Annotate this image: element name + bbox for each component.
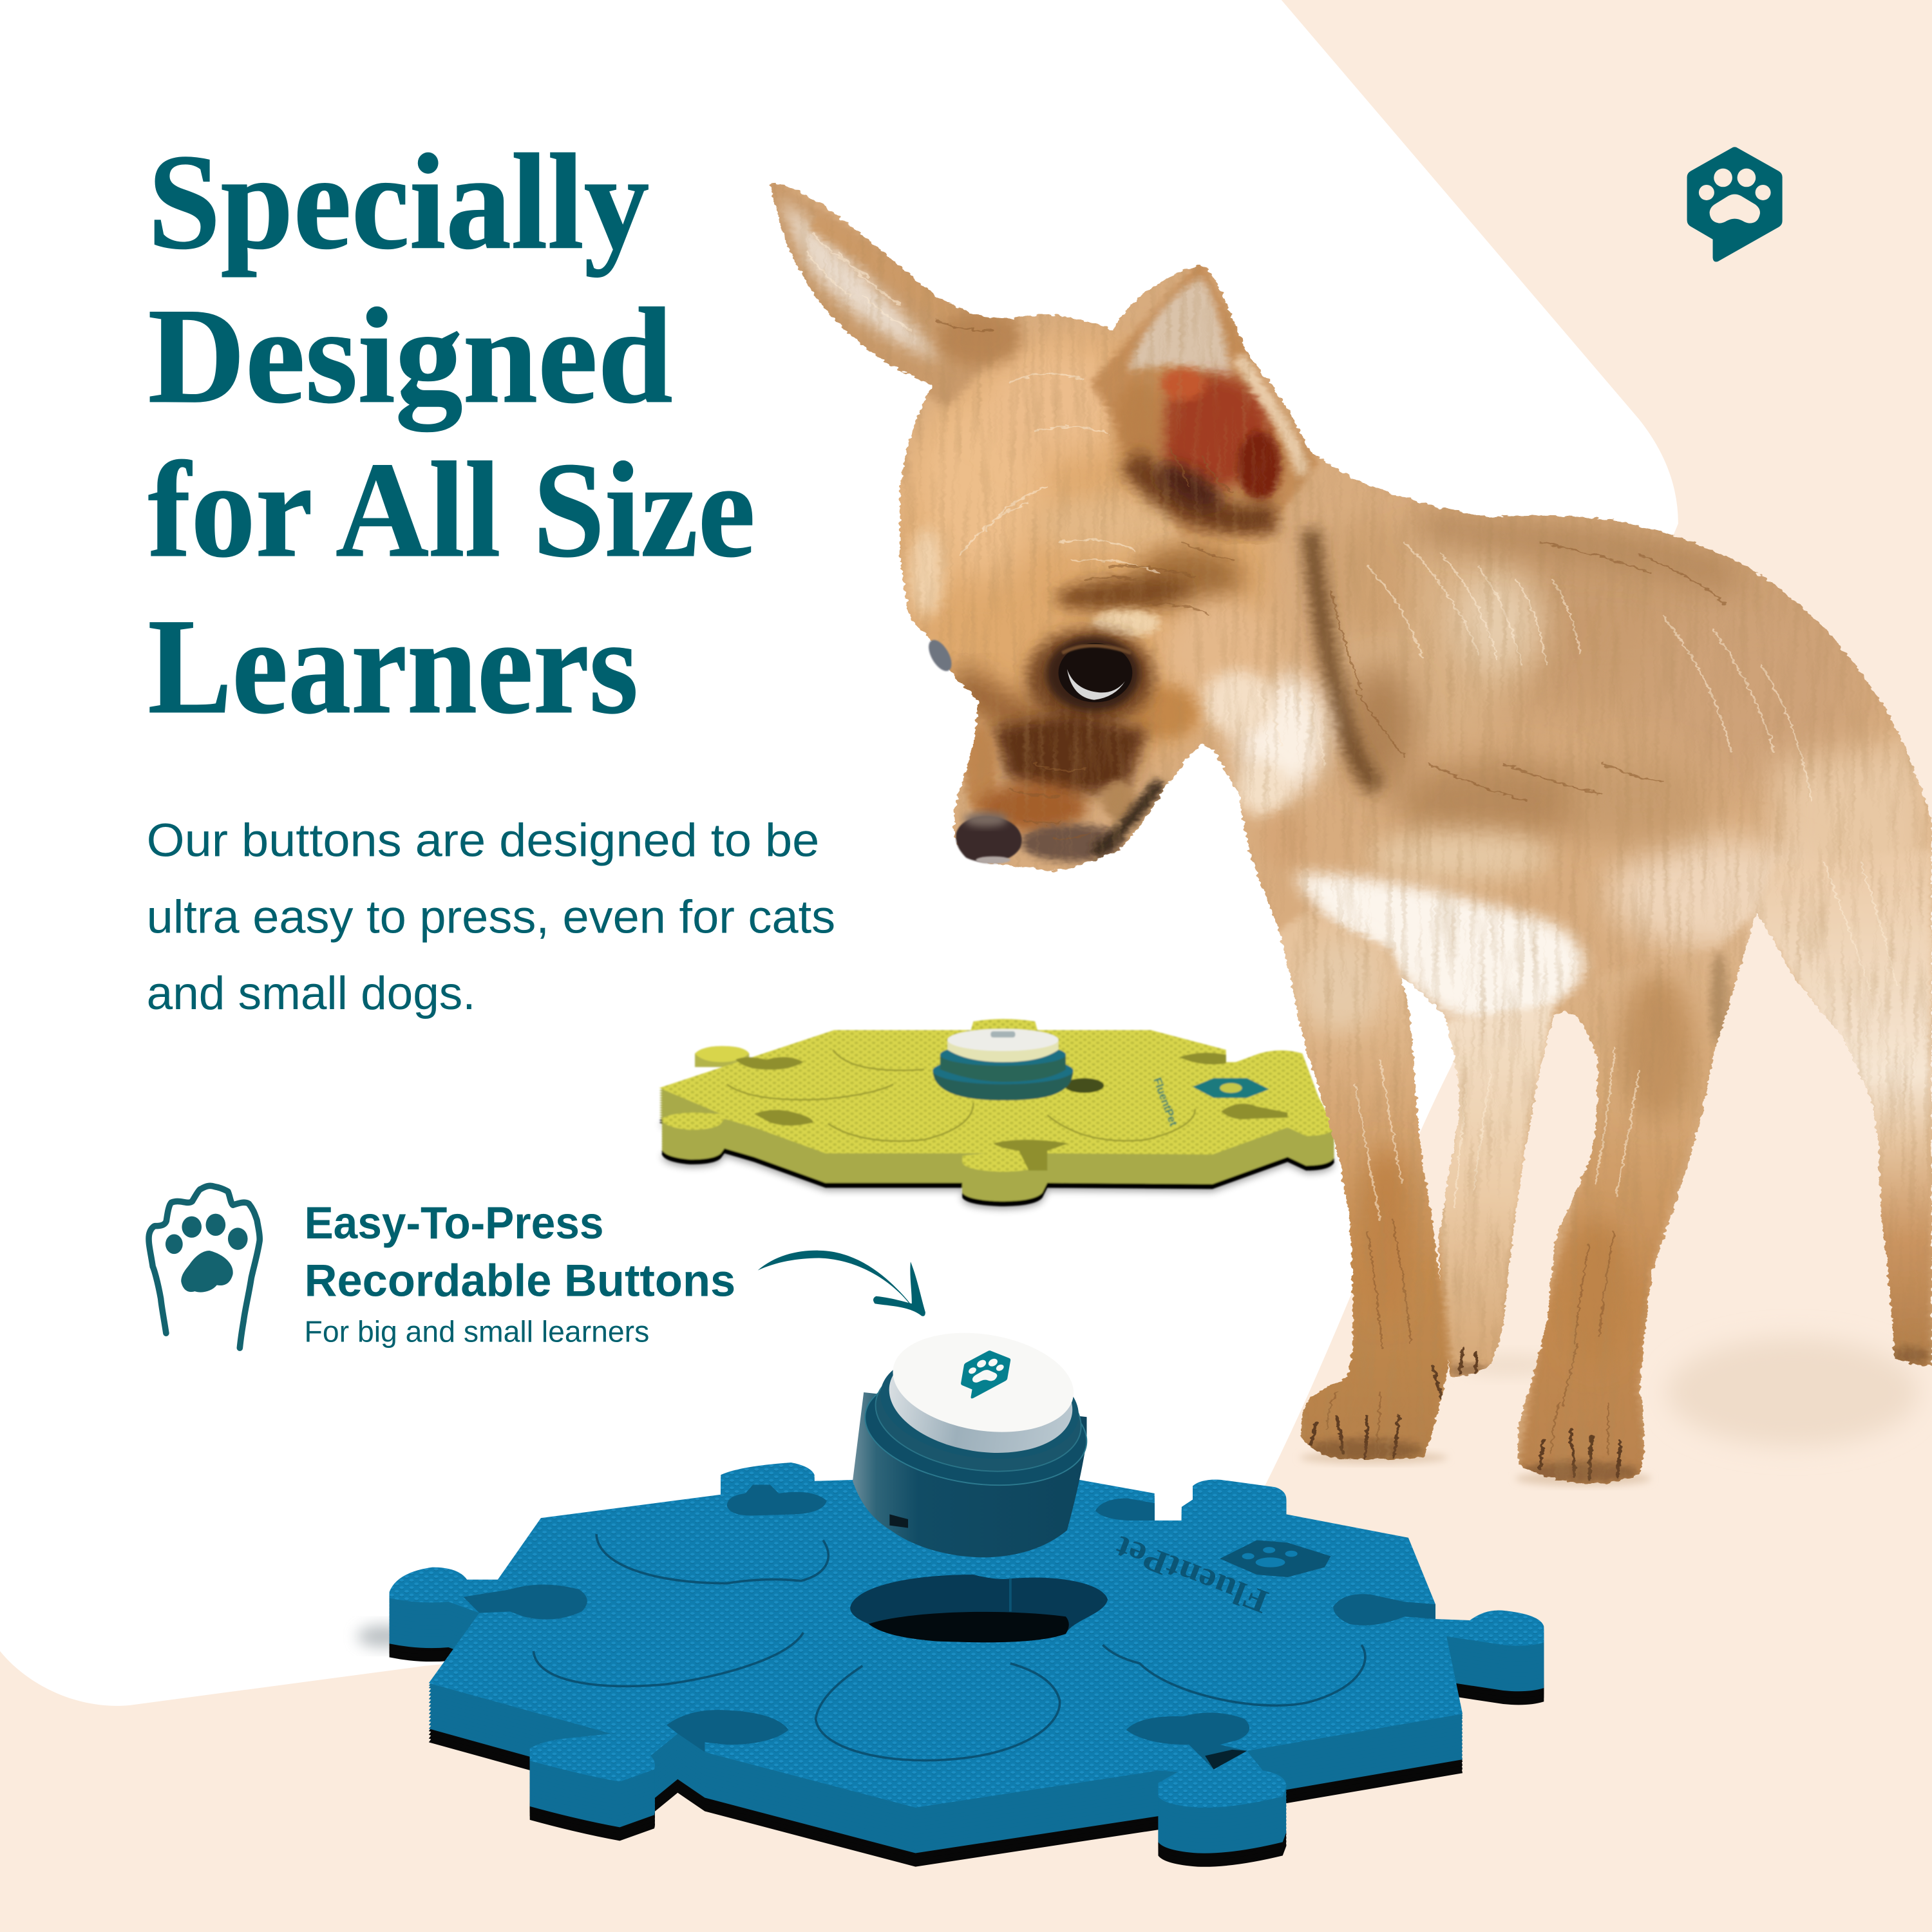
dog: body shading: [1235, 518, 1932, 1025]
dog: eyes and nose: [924, 636, 1140, 864]
dog: base coat: [739, 160, 1932, 1497]
title: Designed: [148, 280, 673, 432]
mat underside: [390, 1511, 1544, 1867]
mat shadow: [659, 1056, 1334, 1209]
feature label: easy-to-press recordable buttons: Recordable Buttons: [305, 1256, 735, 1307]
dog: paw toes: [1311, 1349, 1620, 1479]
mat centre hole: [1065, 1078, 1104, 1093]
dog: head: [900, 339, 1282, 861]
title: Learners: [148, 591, 638, 742]
icon: paw outline: [149, 1186, 260, 1348]
mat logo: FluentPet: [1151, 1076, 1180, 1128]
button top ring: [873, 1338, 1086, 1471]
body text: Our buttons are designed to be: [147, 815, 819, 867]
mat slots: [735, 1053, 1287, 1171]
button upper collar: [868, 1348, 1088, 1484]
dog: paw tips: [1300, 1347, 1929, 1484]
mat top surface: [659, 1019, 1334, 1172]
blue mat shadow on left: [357, 1625, 412, 1647]
recordable button floating above mat: [853, 1321, 1094, 1557]
button white cap side: [882, 1334, 1080, 1465]
mat logo and wordmark: [1110, 1529, 1331, 1620]
icon: brand logo top right: [1687, 147, 1783, 261]
dog photo illustration: [739, 160, 1932, 1497]
title: [148, 126, 755, 742]
mat logo: [1151, 1076, 1269, 1128]
mat logo and wordmark: FluentPet: [1110, 1529, 1273, 1620]
mat pad outlines: [533, 1534, 1365, 1761]
mat side walls: [659, 1021, 1334, 1201]
button white cap top: [886, 1321, 1081, 1444]
dog: fur texture: [739, 160, 1932, 1497]
feature label: easy-to-press recordable buttons: [305, 1198, 735, 1349]
body text: ultra easy to press, even for cats: [147, 891, 835, 943]
arrow to button: [758, 1251, 925, 1316]
blue puzzle mat: [390, 1463, 1544, 1867]
button port: [889, 1514, 908, 1528]
button lower collar: [858, 1360, 1094, 1499]
mat slots: [463, 1484, 1435, 1769]
title: Specially: [148, 126, 649, 278]
mat side walls: [390, 1465, 1544, 1853]
mat pad outlines: [727, 1050, 1195, 1141]
icon: logo on button cap: [958, 1348, 1012, 1400]
dog: fine fur strokes: [807, 234, 1897, 1454]
mat top surface: [390, 1463, 1544, 1808]
title: for All Size: [148, 434, 755, 585]
yellow puzzle mat with button (background, out of focus): [659, 1019, 1334, 1209]
mat centre hole: [850, 1575, 1108, 1642]
dog: legs: [1271, 912, 1756, 1491]
button body: [853, 1392, 1087, 1557]
body text: and small dogs.: [147, 967, 476, 1019]
mat underside: [659, 1051, 1334, 1206]
dog: rear body and hind leg: [1756, 850, 1932, 1374]
feature label: easy-to-press recordable buttons: For big and small learners: [305, 1315, 649, 1349]
feature label: easy-to-press recordable buttons: Easy-To-Press: [305, 1198, 603, 1249]
background: white rounded panel: [0, 0, 1678, 1706]
dog: left ear: [764, 173, 1023, 406]
floor shadows under dog: [1300, 1338, 1918, 1486]
mat back-left knob: [695, 1046, 749, 1067]
body text: [147, 815, 835, 1019]
small button on yellow mat: [933, 1029, 1073, 1101]
dog: right ear: [1090, 259, 1318, 536]
mat slot inner dark: [1205, 1750, 1247, 1769]
